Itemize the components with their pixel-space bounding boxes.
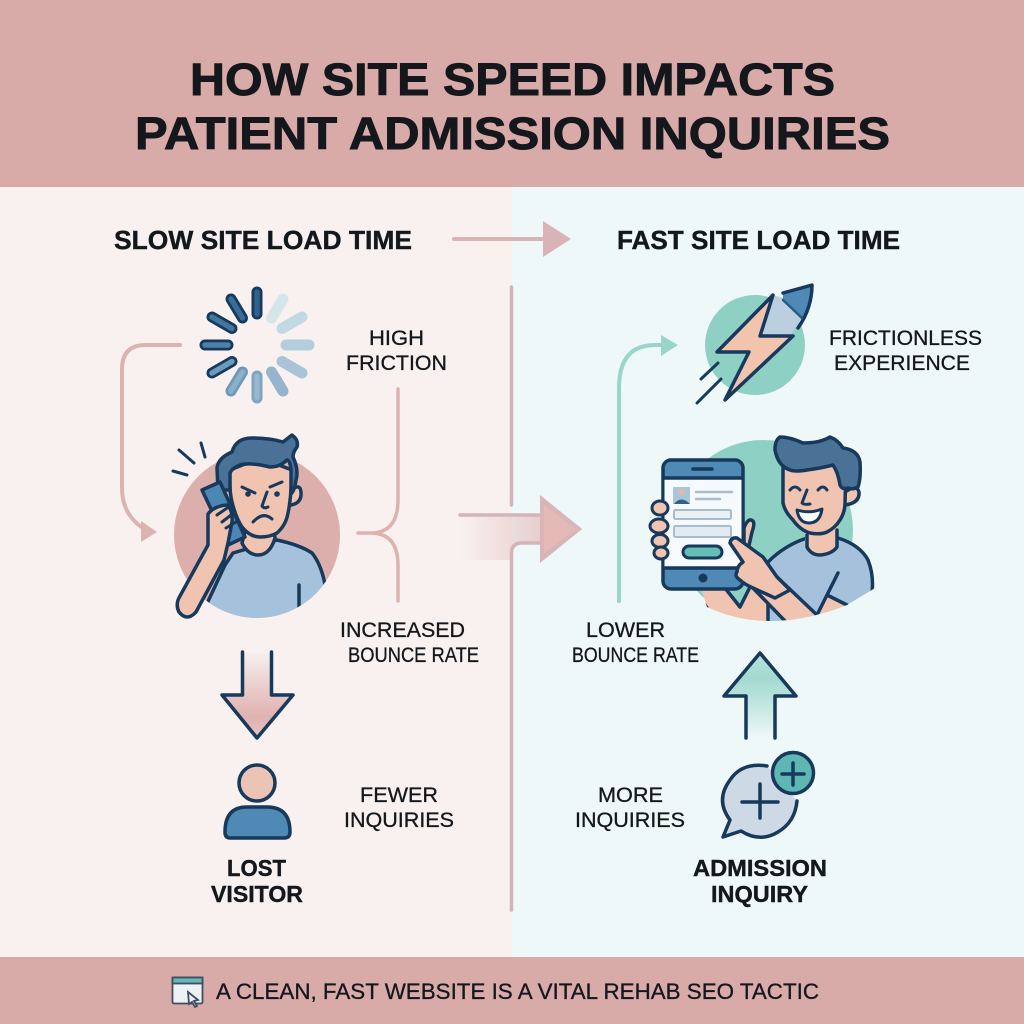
label: lost visitor: VISITOR: [211, 881, 303, 907]
icon: admission inquiry bubble: [722, 752, 814, 837]
heading: slow site load time: SLOW SITE LOAD TIME: [114, 225, 412, 255]
label: high friction: HIGH: [369, 326, 424, 350]
label: lost visitor: LOST: [227, 855, 286, 881]
icon: rocket lightning: [697, 285, 812, 403]
label: admission inquiry: [693, 855, 827, 907]
label: admission inquiry: ADMISSION: [693, 855, 827, 881]
label: lower bounce rate: BOUNCE RATE: [572, 643, 699, 667]
label: high friction: FRICTION: [346, 351, 447, 375]
header band with title: [0, 0, 1024, 187]
label: admission inquiry: INQUIRY: [711, 881, 808, 907]
label: fewer inquiries: [344, 783, 454, 832]
label: increased bounce rate: [340, 618, 479, 667]
icon: browser window cursor: [172, 978, 202, 1007]
icon: lost visitor: [225, 765, 290, 838]
footer text: A CLEAN, FAST WEBSITE IS A VITAL REHAB SEO TACTIC: [216, 979, 819, 1004]
footer band: [0, 957, 1024, 1024]
label: frictionless experience: EXPERIENCE: [834, 351, 970, 375]
label: high friction: [346, 326, 447, 375]
header band with title: PATIENT ADMISSION INQUIRIES: [135, 108, 890, 159]
label: more inquiries: INQUIRIES: [575, 808, 685, 832]
label: increased bounce rate: BOUNCE RATE: [348, 643, 479, 667]
label: fewer inquiries: FEWER: [360, 783, 438, 807]
label: frictionless experience: [829, 326, 982, 375]
arrow: middle transition: [460, 495, 582, 910]
illustration: frustrated user on phone: [173, 435, 340, 640]
label: fewer inquiries: INQUIRIES: [344, 808, 454, 832]
header band with title: HOW SITE SPEED IMPACTS: [190, 54, 835, 105]
label: lower bounce rate: LOWER: [586, 618, 665, 642]
label: more inquiries: [575, 783, 685, 832]
brace connector: [358, 389, 398, 601]
arrow: slow to fast: [454, 221, 571, 257]
label: lost visitor: [211, 855, 303, 907]
icon: loading spinner: [205, 292, 309, 398]
label: lower bounce rate: [572, 618, 699, 667]
label: more inquiries: MORE: [598, 783, 663, 807]
illustration: happy user with phone form: [650, 437, 873, 640]
center divider line: [510, 287, 513, 505]
background panels: [0, 187, 1024, 957]
arrow: lower bounce up to frictionless: [619, 335, 678, 601]
arrow: down to lost visitor: [222, 652, 293, 738]
heading: fast site load time: FAST SITE LOAD TIME: [617, 225, 900, 255]
arrow: up from admission inquiry: [724, 653, 796, 738]
label: frictionless experience: FRICTIONLESS: [829, 326, 982, 350]
label: increased bounce rate: INCREASED: [340, 618, 465, 642]
arrow: spinner to frustrated user: [122, 345, 180, 542]
